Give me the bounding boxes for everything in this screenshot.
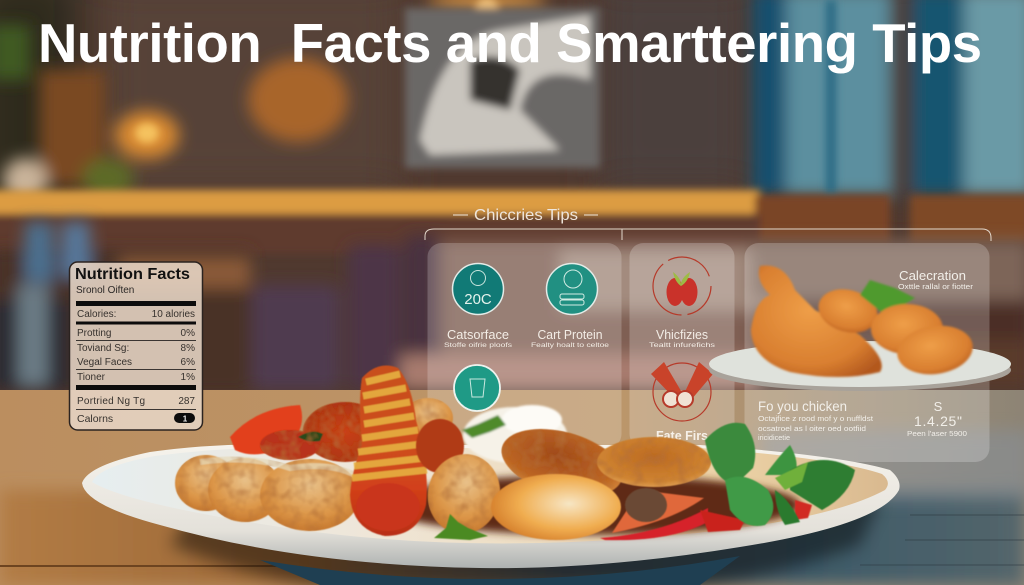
calecration note: Oxttle rallal or fiotter <box>898 284 974 291</box>
label thick rule 1 <box>76 301 196 306</box>
fried chicken pieces <box>751 266 976 379</box>
rice <box>462 405 567 463</box>
icon: glass <box>454 365 500 411</box>
row: protting <box>77 328 195 339</box>
tomato wedge <box>230 405 302 454</box>
tomato slices <box>600 490 812 540</box>
row: protting: Protting <box>77 328 111 339</box>
row: calories: 10 alories <box>152 309 195 320</box>
chicken stats: S <box>934 399 943 414</box>
calecration note <box>898 268 974 291</box>
row: tioner: Tioner <box>77 372 106 383</box>
row divider <box>76 409 196 410</box>
tip: vhicfizies: Vhicfizies <box>656 328 708 342</box>
chicken description: Fo you chicken <box>758 399 847 414</box>
tip: cart protein: Cart Protein <box>538 327 602 342</box>
tip: cart protein: Fealty hoalt to celtoe <box>531 342 609 349</box>
icon: red produce with cycle arrows <box>653 257 711 315</box>
calecration note: Calecration <box>899 268 966 283</box>
row: vegal <box>77 357 195 368</box>
panel: chicken calculation <box>709 243 1011 462</box>
row: vegal: 6% <box>181 357 195 368</box>
label subheading: Sronol Oiften <box>76 285 134 296</box>
tip: catsorface: Catsorface <box>447 327 509 342</box>
chicken description: iricidicetie <box>758 435 790 442</box>
calorie pill <box>174 413 195 424</box>
chicken stats <box>907 399 967 438</box>
row: tioner <box>77 372 195 383</box>
chicken stats: 1.4.25" <box>914 413 962 429</box>
wooden table <box>0 390 1024 585</box>
row divider <box>76 369 196 370</box>
small plate <box>709 341 1011 391</box>
row divider <box>76 340 196 341</box>
panel: nutrition facts label <box>70 262 202 430</box>
row: toviand: 8% <box>181 343 195 354</box>
icon: fats ribbon badge <box>651 362 713 421</box>
tip: catsorface: Stoffe oifrie ploofs <box>444 342 513 349</box>
panel: calorie and protein tips <box>428 243 622 448</box>
row: calories: Calories: <box>77 309 116 320</box>
tip: fate firs: Fate Firs <box>656 428 708 443</box>
tips header <box>425 207 991 241</box>
row: toviand: Toviand Sg: <box>77 343 129 354</box>
icon: calorie dial <box>452 264 504 314</box>
panel: vitamins and fats tips <box>630 243 734 448</box>
main plate <box>82 444 900 585</box>
basil leaves <box>705 423 855 526</box>
chicken description: ocsatroel as l oiter oed ootfiid <box>758 426 866 433</box>
chicken pieces, centre <box>420 417 711 541</box>
chicken description <box>758 399 873 442</box>
grilled food on plate <box>175 366 855 541</box>
row: tioner: 1% <box>181 372 195 383</box>
label heading: Nutrition Facts <box>75 266 190 283</box>
left chicken pieces <box>175 455 360 531</box>
striped sausage <box>350 366 427 536</box>
label thick rule 3 <box>76 385 196 390</box>
tip: catsorface <box>444 327 513 349</box>
tips header: Chiccries Tips <box>474 207 578 224</box>
label thick rule 2 <box>76 322 196 324</box>
charred tomato <box>416 419 464 473</box>
chicken stats: Peen l'aser 5900 <box>907 431 967 438</box>
back meat <box>260 398 453 462</box>
walnut <box>625 488 667 522</box>
row: portried <box>77 396 195 407</box>
row: calorns: Calorns <box>77 413 113 425</box>
row: calories <box>77 309 195 320</box>
row: protting: 0% <box>181 328 195 339</box>
tip: cart protein <box>531 327 609 349</box>
golden front chicken <box>491 474 621 540</box>
row: portried: Portried Ng Tg <box>77 396 145 407</box>
title: Nutrition Facts and Smarttering Tips <box>38 13 982 74</box>
row: portried: 287 <box>178 396 195 407</box>
row: vegal: Vegal Faces <box>77 357 132 368</box>
chicken description: Octajfice z rood mof y o nuffldst <box>758 416 873 423</box>
calorie pill: 1 <box>183 414 188 424</box>
tip: vhicfizies: Tealtt infurefichs <box>649 342 716 349</box>
row: toviand <box>77 343 195 354</box>
parsley garnish <box>434 514 488 540</box>
icon: calorie dial: 20C <box>464 291 492 308</box>
icon: protein stack <box>546 264 598 314</box>
tip: vhicfizies <box>649 328 716 349</box>
